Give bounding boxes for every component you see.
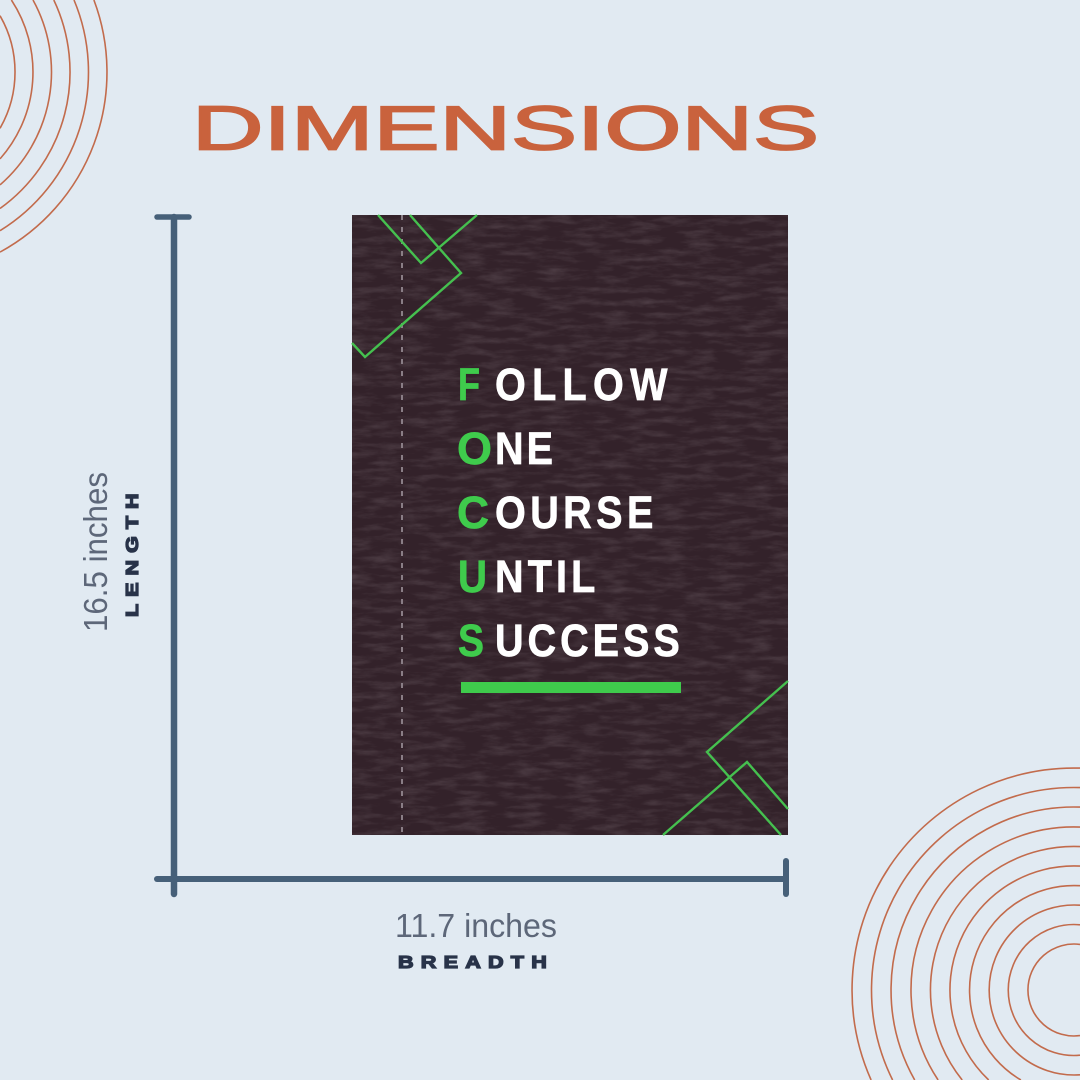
concentric arcs: bottom right [852, 768, 1080, 1080]
line: Until: NTIL [495, 552, 595, 602]
concentric arcs: top left [0, 0, 107, 252]
line: One [457, 423, 553, 474]
breadth value label: 11.7 inches [395, 907, 557, 944]
line: Until: U [458, 551, 487, 602]
length axis [157, 217, 189, 894]
line: Course: OURSE [495, 488, 653, 538]
leather texture [352, 215, 788, 835]
poster background [352, 215, 788, 835]
line: One: O [457, 423, 492, 474]
breadth axis [157, 861, 786, 894]
length caption: LENGTH [123, 493, 143, 617]
line: Follow: OLLOW [495, 360, 667, 410]
acronym text: FOCUS [457, 359, 680, 666]
stitching [401, 215, 403, 835]
length value label: 16.5 inches [77, 472, 114, 632]
line: Course: C [457, 487, 489, 538]
line: Success: UCCESS [495, 616, 680, 666]
line: Follow: F [458, 359, 480, 410]
green underline bar [461, 682, 681, 693]
green outline shapes: top left [352, 215, 477, 357]
green outline shapes: bottom right [663, 681, 788, 835]
poster: leather cover [352, 215, 788, 835]
line: Success: S [458, 615, 484, 666]
line: One: NE [495, 424, 553, 474]
breadth caption: BREADTH [398, 953, 547, 973]
title: DIMENSIONS [192, 94, 819, 164]
